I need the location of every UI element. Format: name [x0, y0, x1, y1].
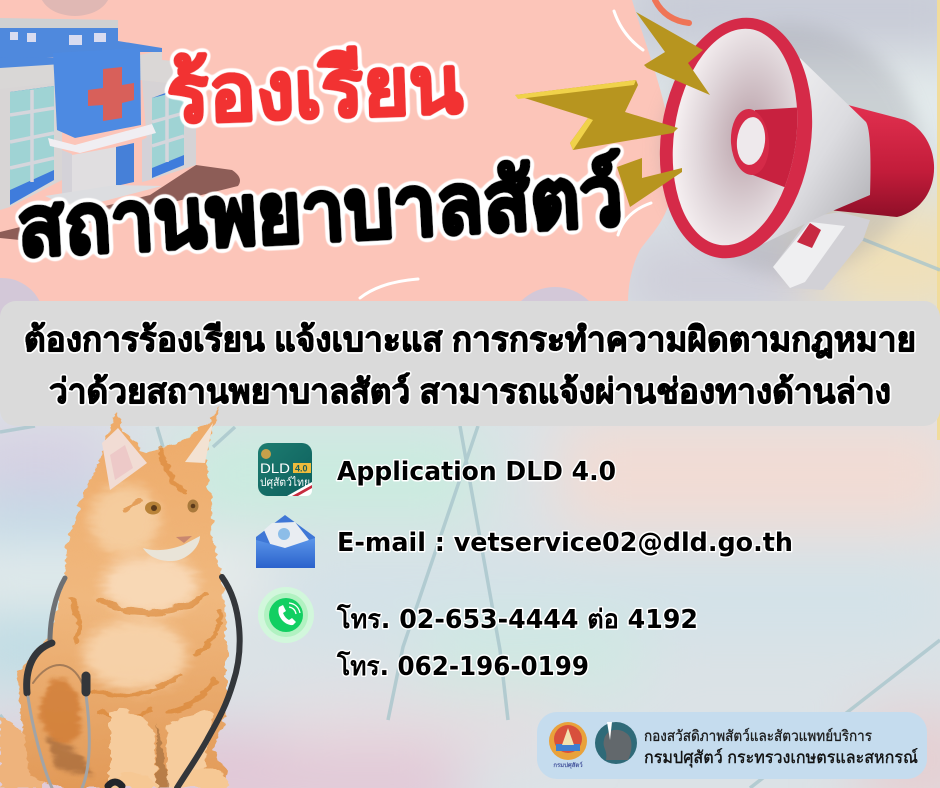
lilac blobs	[0, 0, 589, 315]
label: phone 2: โทร. 062-196-0199	[336, 650, 589, 682]
logo: department of livestock: กรมปศุสัตว์	[553, 761, 583, 769]
icon: DLD 4.0 app: DLD	[260, 460, 290, 476]
megaphone bell	[660, 18, 812, 258]
decorative lines	[0, 238, 940, 788]
cat head and chest shading	[90, 485, 160, 555]
megaphone rear barrel	[828, 105, 934, 217]
panel: department footer	[537, 712, 927, 779]
panel: intro message	[0, 301, 940, 426]
megaphone handle	[773, 212, 870, 290]
intro line 2: ว่าด้วยสถานพยาบาลสัตว์ สามารถแจ้งผ่านช่องทางด้านล่าง	[49, 372, 891, 411]
decorative arcs	[360, 0, 689, 298]
intro line 1: ต้องการร้องเรียน แจ้งเบาะแส การกระทำความผิดตามกฎหมาย	[24, 321, 916, 359]
logo: elephant emblem	[595, 722, 637, 764]
icon: lightning bolts	[515, 12, 710, 207]
label: phone 1: โทร. 02-653-4444 ต่อ 4192	[336, 603, 698, 635]
icon: DLD 4.0 app: ปศุสัตว์ไทย	[260, 476, 310, 489]
stethoscope	[27, 577, 240, 788]
label: email: E-mail : vetservice02@dld.go.th	[337, 528, 793, 558]
megaphone drop shadow	[660, 25, 920, 275]
footer line 1: กองสวัสดิภาพสัตว์และสัตวแพทย์บริการ	[644, 728, 872, 745]
cat face	[145, 502, 161, 514]
megaphone cone	[750, 58, 870, 250]
illustration: orange cat with stethoscope	[0, 407, 240, 788]
icon: DLD 4.0 app	[258, 443, 312, 496]
title: ร้องเรียน: ร้องเรียน	[165, 40, 464, 139]
cat front legs	[110, 711, 213, 788]
icon: email envelope	[256, 515, 315, 568]
peach blob	[0, 0, 673, 302]
logo: department of livestock	[549, 722, 587, 769]
label: application: Application DLD 4.0	[337, 457, 616, 487]
cat ears	[102, 428, 147, 490]
icon: hospital building	[0, 18, 240, 240]
icon: megaphone	[645, 8, 934, 290]
footer line 2: กรมปศุสัตว์ กระทรวงเกษตรและสหกรณ์	[644, 748, 918, 768]
cat fur	[0, 407, 227, 788]
title: สถานพยาบาลสัตว์: สถานพยาบาลสัตว์	[15, 148, 625, 274]
icon: phone	[258, 587, 314, 643]
icon: DLD 4.0 app: 4.0	[295, 464, 308, 474]
